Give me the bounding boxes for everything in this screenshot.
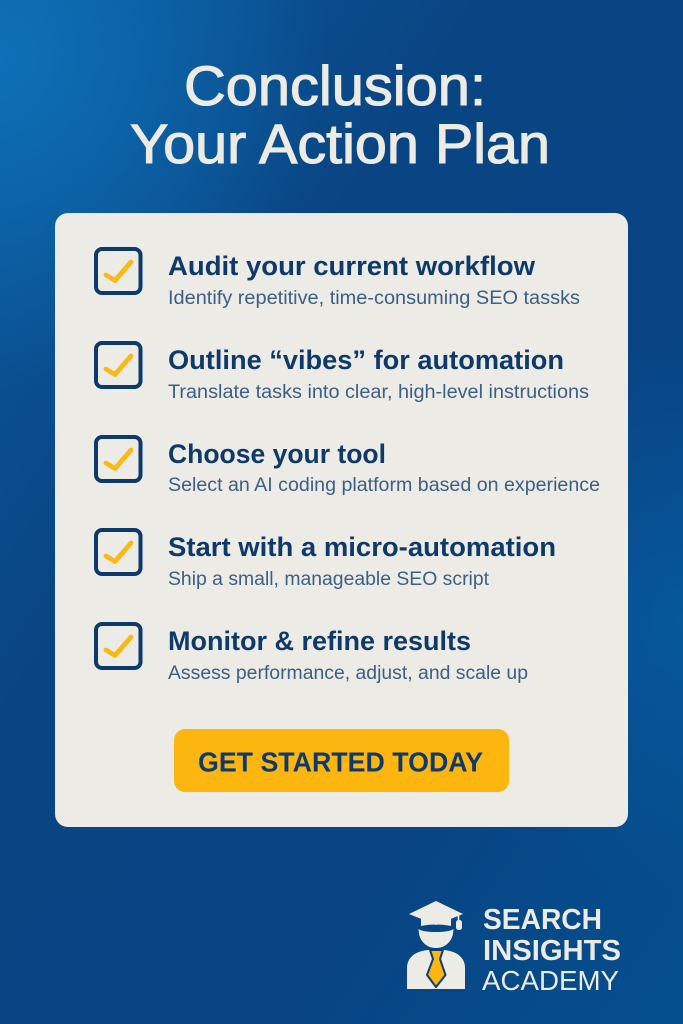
logo wordmark: SEARCH — [483, 904, 602, 936]
icon: checkbox 1 — [96, 249, 140, 293]
checklist item 5: monitor and refine — [96, 624, 528, 684]
description 1: Identify repetitive, time-consuming SEO tassks — [168, 288, 580, 309]
heading 1: Audit your current workflow — [168, 251, 536, 281]
heading 2: Outline “vibes” for automation — [168, 345, 564, 375]
title — [130, 54, 550, 175]
checklist item 3: choose tool — [96, 437, 600, 496]
heading 3: Choose your tool — [168, 439, 386, 469]
heading 4: Start with a micro-automation — [168, 532, 556, 562]
description 3: Select an AI coding platform based on experience — [168, 475, 600, 496]
title: Your Action Plan — [130, 112, 550, 175]
heading 5: Monitor & refine results — [168, 626, 471, 656]
description 4: Ship a small, manageable SEO script — [168, 569, 490, 590]
icon: checkbox 2 — [96, 343, 140, 387]
icon: checkbox 5 — [96, 624, 140, 668]
icon: graduate with tie — [407, 901, 465, 989]
title: Conclusion: — [184, 54, 486, 117]
icon: checkbox 3 — [96, 437, 140, 481]
logo wordmark — [482, 904, 621, 996]
logo wordmark: INSIGHTS — [483, 935, 621, 967]
description 5: Assess performance, adjust, and scale up — [168, 663, 528, 684]
logo: Search Insights Academy — [407, 901, 621, 996]
panel: action plan checklist — [55, 213, 628, 827]
checklist item 2: outline vibes — [96, 343, 589, 403]
logo wordmark: ACADEMY — [482, 965, 619, 996]
icon: checkbox 4 — [96, 530, 140, 574]
button: get started today — [174, 729, 509, 792]
checklist item 4: micro-automation — [96, 530, 556, 590]
button: get started today: GET STARTED TODAY — [198, 746, 483, 778]
description 2: Translate tasks into clear, high-level instructions — [168, 382, 589, 403]
checklist item 1: audit workflow — [96, 249, 580, 309]
